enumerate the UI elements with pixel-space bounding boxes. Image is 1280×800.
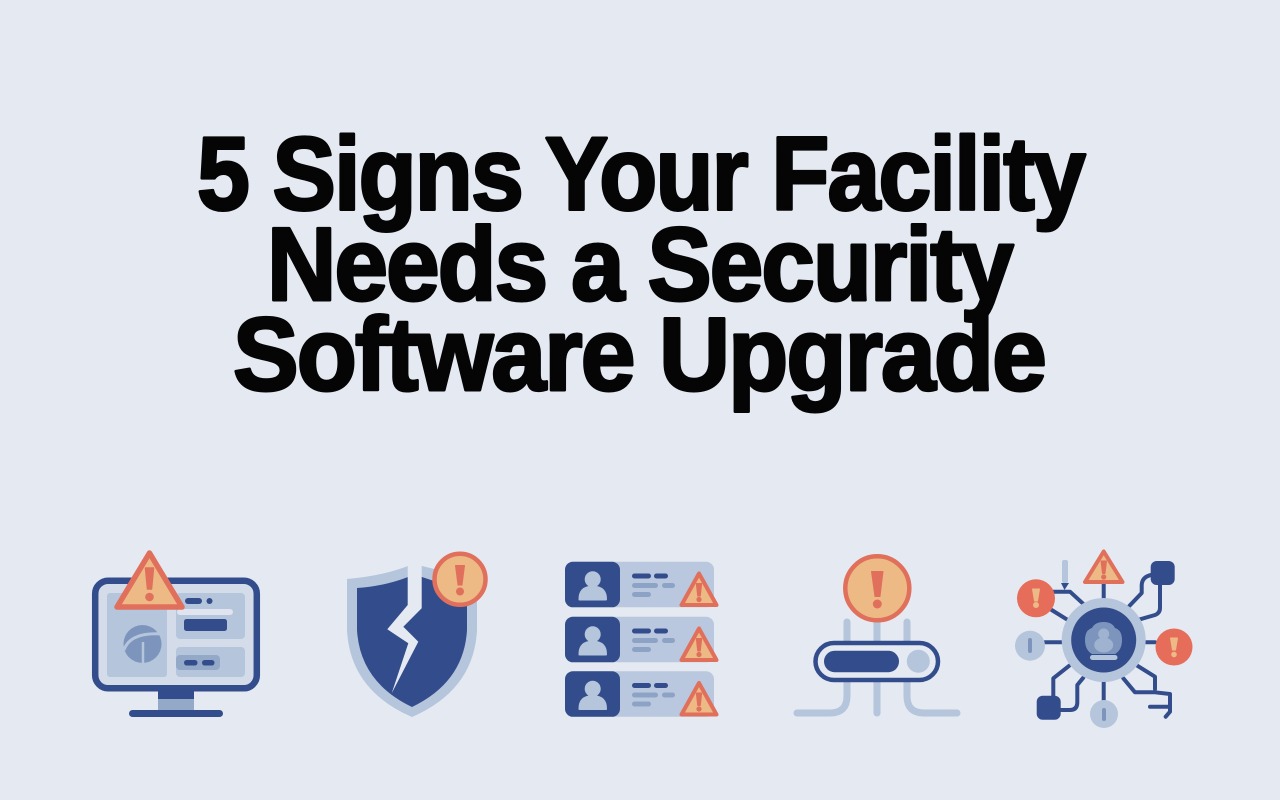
- user card 2: [565, 617, 716, 662]
- title line 3: Software Upgrade: [233, 297, 1045, 413]
- left grey node: [1015, 631, 1045, 661]
- shield crack: [387, 560, 422, 693]
- title line 2: Needs a Security: [267, 207, 1014, 323]
- dashboard top panel: [176, 593, 245, 639]
- warning triangle: [117, 553, 182, 607]
- bottom left square node: [1037, 696, 1061, 720]
- alert circle: [434, 554, 486, 605]
- switch knob: [907, 650, 930, 673]
- hub inner circle: [1071, 608, 1136, 672]
- top right square node: [1151, 561, 1175, 585]
- right alert: [1156, 628, 1192, 666]
- monitor frame: [95, 581, 257, 688]
- shield outer: [347, 566, 477, 717]
- icon: user list with warnings: [565, 562, 716, 717]
- hub user figure: [1085, 622, 1122, 660]
- dashboard bottom panel: [176, 647, 245, 677]
- connector lines: [797, 622, 957, 713]
- shield inner: [357, 577, 467, 707]
- bottom panel pills: [176, 655, 220, 670]
- icon: cracked shield with alert: [347, 554, 486, 717]
- user card 1: [565, 562, 716, 607]
- bottom grey node: [1090, 700, 1118, 728]
- icon: monitor with warning triangle: [95, 553, 257, 717]
- pie chart: [124, 625, 162, 664]
- network connectors: [1045, 575, 1170, 717]
- monitor stand: [129, 690, 223, 717]
- top left alert: [1017, 579, 1055, 617]
- alert circle: [845, 556, 909, 620]
- warning triangle: [1085, 552, 1122, 582]
- top panel bars: [177, 598, 233, 631]
- switch pill: [816, 643, 938, 680]
- pen marker: [1061, 560, 1069, 590]
- title: [197, 116, 1086, 413]
- switch bar: [824, 651, 899, 672]
- user card 3: [565, 671, 716, 717]
- icon: switch with alert circle: [797, 556, 957, 713]
- hub outer ring: [1062, 598, 1146, 682]
- icon: network hub with alerts: [1015, 552, 1192, 728]
- dashboard left panel: [107, 593, 167, 677]
- title line 1: 5 Signs Your Facility: [197, 116, 1086, 232]
